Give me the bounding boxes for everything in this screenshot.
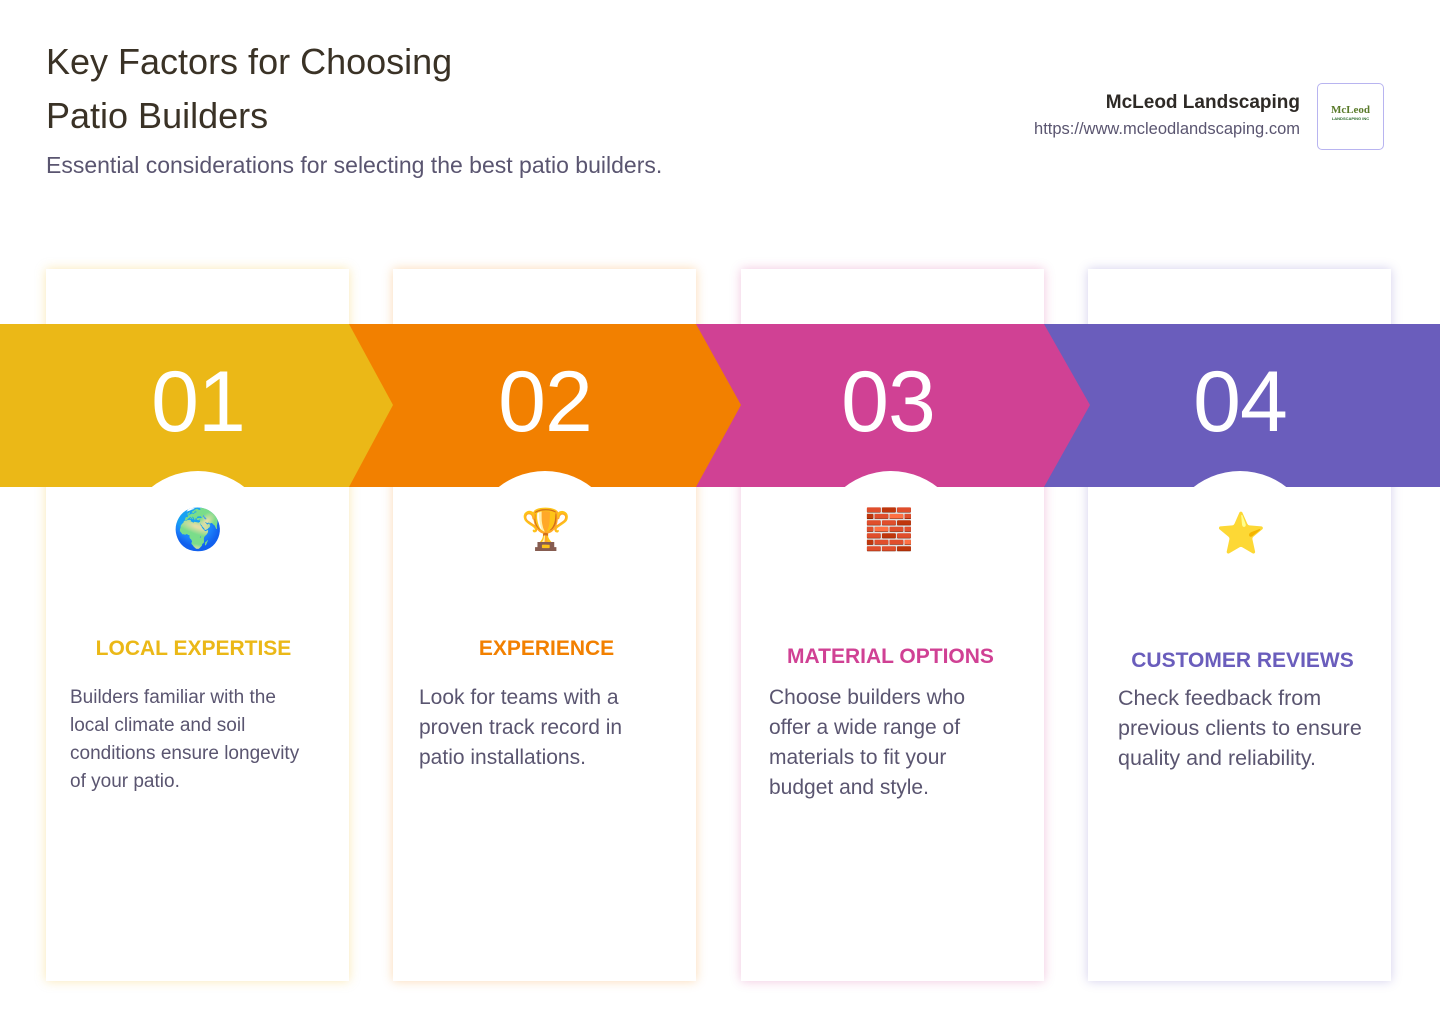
logo: McLeod (1331, 104, 1370, 116)
icon: star: ⭐ (1216, 510, 1266, 557)
heading 3: MATERIAL OPTIONS (787, 645, 994, 668)
card 4 (1088, 269, 1391, 981)
logo (1317, 83, 1384, 150)
icon: trophy: 🏆 (521, 506, 571, 553)
heading 1: LOCAL EXPERTISE (96, 637, 291, 660)
number 03: 03 (841, 354, 935, 450)
brand name: McLeod Landscaping (1106, 92, 1300, 113)
logo: LANDSCAPING INC (1332, 116, 1369, 121)
icon: globe: 🌍 (173, 506, 223, 553)
text 4: Check feedback from previous clients to ensure quality and reliability. (1118, 686, 1362, 770)
card 1 (46, 269, 349, 981)
heading 4: CUSTOMER REVIEWS (1131, 649, 1354, 672)
number 04: 04 (1193, 354, 1287, 450)
heading 2: EXPERIENCE (479, 637, 614, 660)
title: Key Factors for Choosing Patio Builders (46, 41, 452, 136)
text 1: Builders familiar with the local climate and soil conditions ensure longevity of your patio. (70, 687, 299, 792)
number 02: 02 (498, 354, 592, 450)
text 2: Look for teams with a proven track record in patio installations. (419, 686, 622, 769)
subtitle: Essential considerations for selecting the best patio builders. (46, 152, 662, 178)
brand block (1034, 83, 1384, 150)
number 01: 01 (151, 354, 245, 450)
card 2 (393, 269, 696, 981)
icon: brick: 🧱 (864, 506, 914, 553)
text 3: Choose builders who offer a wide range of materials to fit your budget and style. (769, 686, 965, 799)
card 3 (741, 269, 1044, 981)
brand url: https://www.mcleodlandscaping.com (1034, 120, 1300, 138)
